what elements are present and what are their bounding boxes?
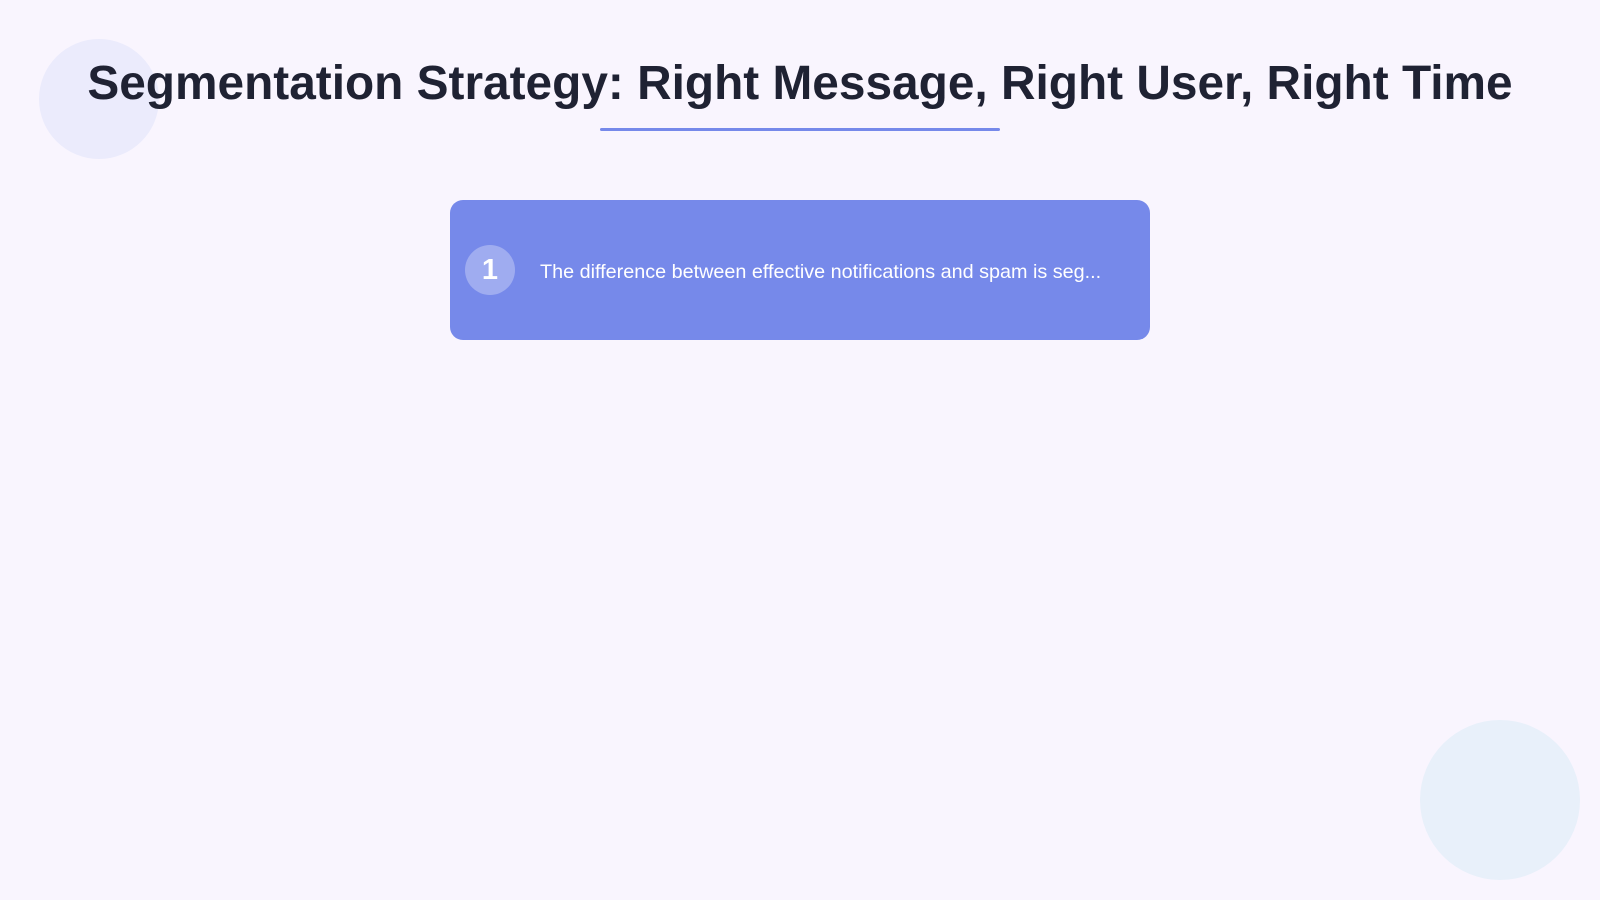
title underline — [600, 128, 1000, 131]
number badge: 1 — [482, 254, 498, 286]
card: step 1 — [450, 200, 1150, 340]
decorative circle top-left — [39, 39, 159, 159]
decorative circle bottom-right — [1420, 720, 1580, 880]
card text: The difference between effective notifications and spam is seg... — [540, 261, 1101, 283]
title: Segmentation Strategy: Right Message, Right User, Right Time — [87, 57, 1513, 110]
number badge — [465, 245, 515, 295]
